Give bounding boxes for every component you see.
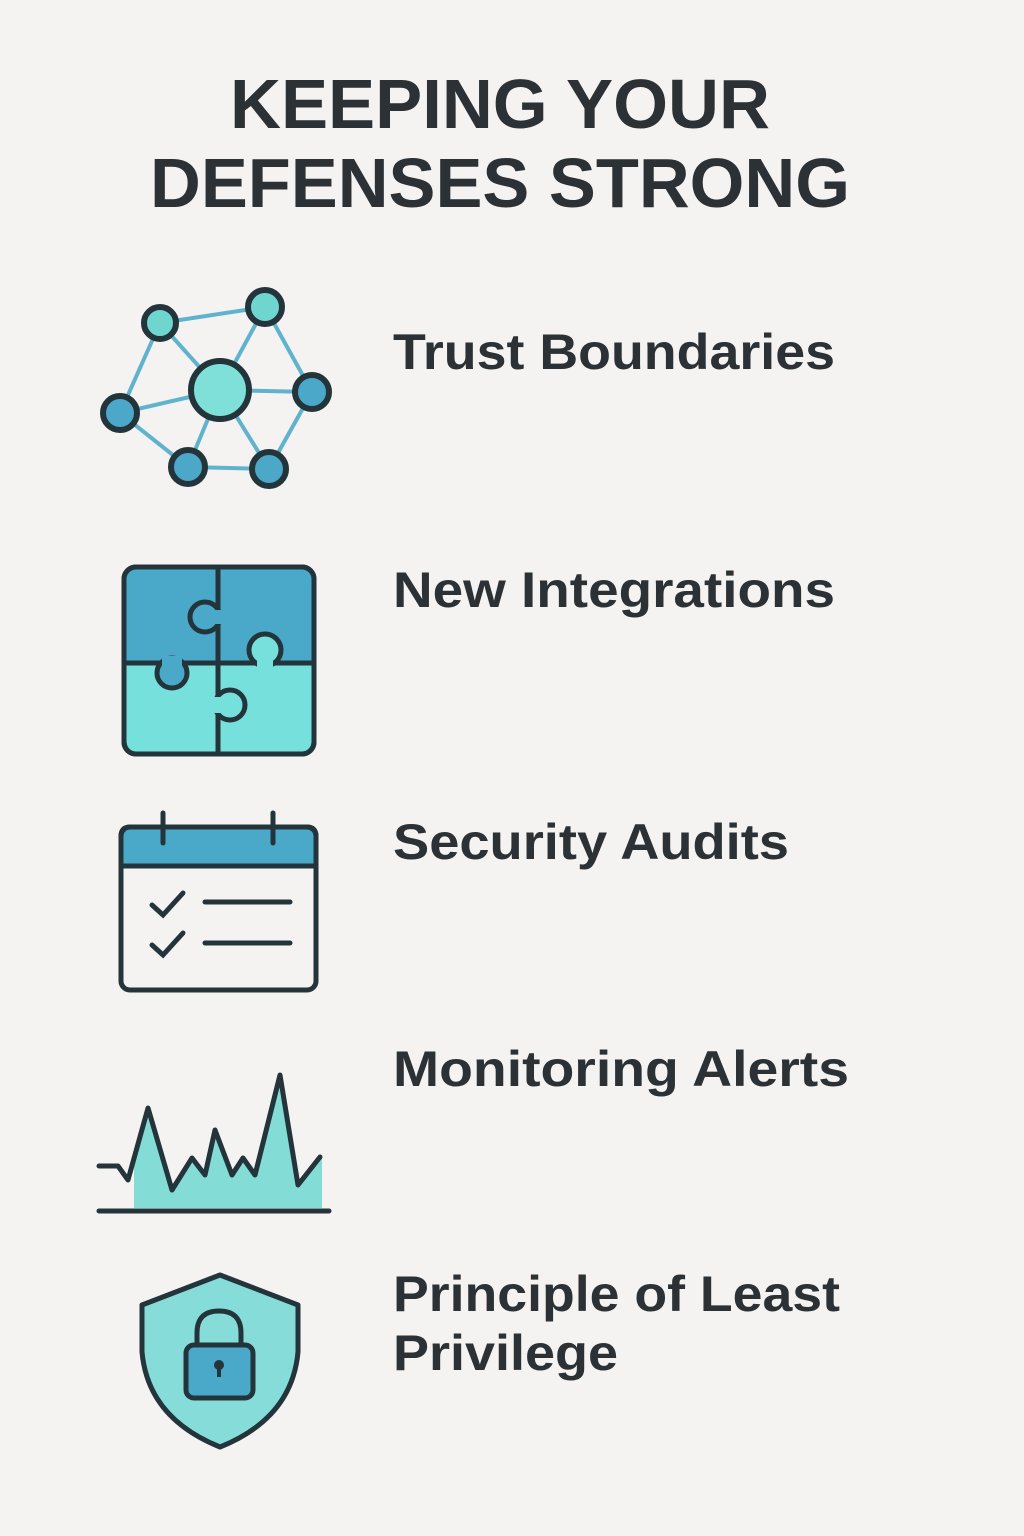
icon: network — [103, 290, 329, 486]
icon: monitoring chart — [99, 1075, 329, 1211]
title — [150, 65, 850, 222]
title: DEFENSES STRONG — [150, 144, 850, 222]
label: New Integrations: New Integrations — [393, 562, 835, 618]
icon: puzzle — [124, 567, 314, 754]
icon: shield lock — [142, 1275, 298, 1447]
label: Trust Boundaries: Trust Boundaries — [393, 324, 835, 380]
label: Security Audits: Security Audits — [393, 814, 789, 870]
title: KEEPING YOUR — [230, 65, 770, 143]
label: Principle of Least Privilege: Privilege — [393, 1325, 618, 1381]
label: Monitoring Alerts: Monitoring Alerts — [393, 1041, 849, 1097]
label: Principle of Least Privilege: Principle of Least — [393, 1266, 840, 1322]
label: Principle of Least Privilege — [393, 1266, 840, 1381]
icon: calendar — [121, 813, 316, 990]
